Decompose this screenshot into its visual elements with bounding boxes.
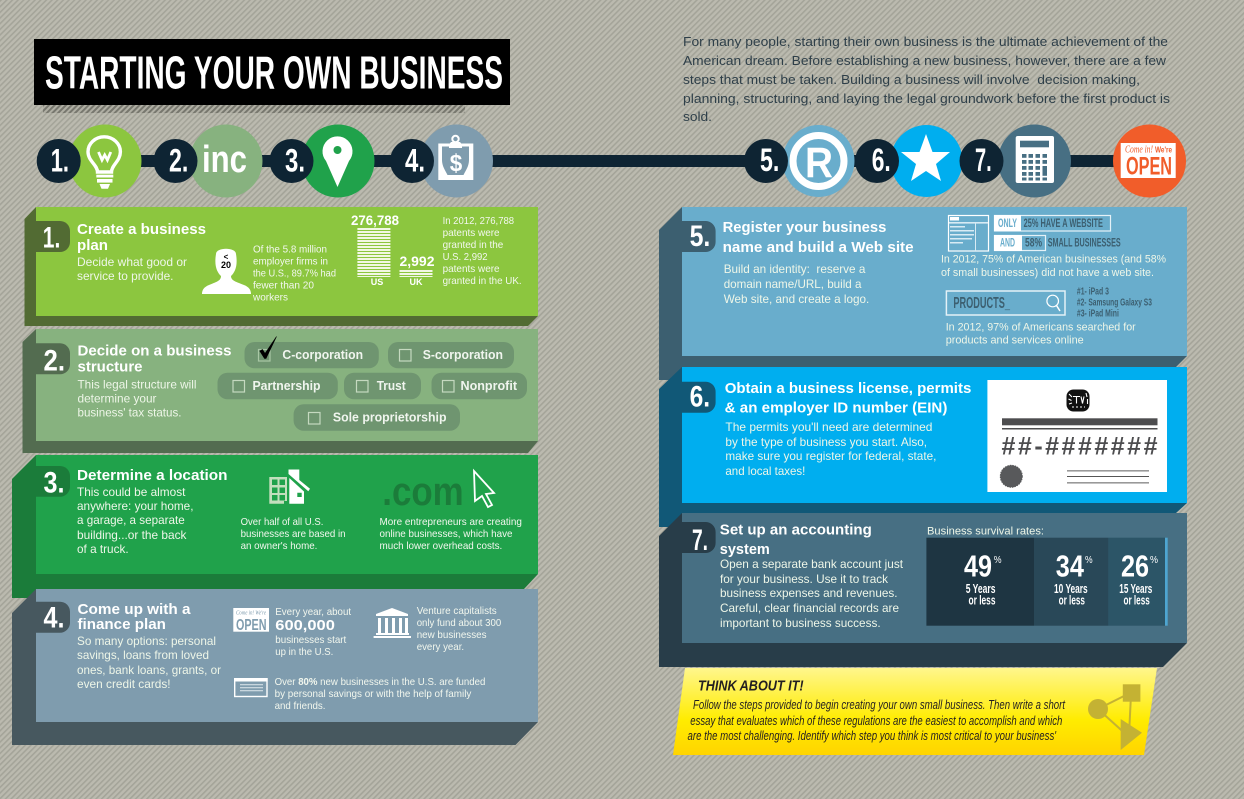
description 3 bbox=[77, 485, 194, 556]
step 5 marker: registered mark: 5. bbox=[760, 142, 779, 178]
option: Partnership bbox=[218, 373, 338, 399]
panel 5: register your business bbox=[659, 207, 1187, 380]
stat: employer firms: fewer than 20 bbox=[253, 279, 314, 291]
number tab 6: 6. bbox=[690, 381, 710, 414]
stat: 600,000 businesses: Every year, about bbox=[275, 606, 351, 618]
callout heading: THINK ABOUT IT! bbox=[698, 678, 804, 695]
survival column: 5 years: 5 Years bbox=[966, 582, 996, 596]
bar chart: patents US vs UK: UK bbox=[410, 277, 423, 287]
stat box: 58% small businesses: SMALL BUSINESSES bbox=[1048, 236, 1121, 250]
icon: connected shapes bbox=[1088, 684, 1142, 750]
stat: personal savings funding: by personal savings or with the help of family bbox=[275, 688, 472, 700]
description 5: Build an identity: reserve a bbox=[724, 262, 866, 276]
stat text: web site ownership bbox=[941, 254, 1166, 279]
stat text: online searches: products and services online bbox=[946, 335, 1084, 347]
intro paragraph: planning, structuring, and laying the legal groundwork before the first product is bbox=[683, 91, 1170, 106]
stat: online businesses bbox=[380, 516, 522, 552]
heading 6 bbox=[725, 380, 971, 416]
description 4: savings, loans from loved bbox=[77, 648, 209, 662]
icon: building and house bbox=[269, 470, 310, 504]
stat: employer firms bbox=[252, 243, 336, 303]
survival column: 5 years: 49 bbox=[964, 549, 992, 584]
icon: person with fewer than 20: 20 bbox=[221, 260, 231, 270]
stat: patents: U.S. 2,992 bbox=[443, 251, 488, 263]
callout: think about it bbox=[673, 668, 1157, 755]
stat: personal savings funding: and friends. bbox=[275, 700, 326, 712]
description 7: important to business success. bbox=[720, 616, 881, 630]
number tab 7: 7. bbox=[692, 524, 708, 557]
list: top searched products: #2- Samsung Galaxy S3 bbox=[1077, 298, 1152, 309]
step 5 marker: registered mark bbox=[744, 125, 854, 197]
survival column: 10 years: 34 bbox=[1056, 549, 1085, 584]
option: Nonprofit bbox=[432, 373, 527, 399]
option: S-corporation bbox=[388, 342, 514, 368]
stat: 600,000 businesses: businesses start bbox=[275, 634, 346, 646]
stat: home-based businesses: Over half of all U.S. bbox=[241, 516, 323, 528]
survival column: 5 years: % bbox=[994, 555, 1002, 566]
option: C-corporation (checked) bbox=[244, 336, 379, 368]
stat: personal savings funding: Over 80% new businesses in the U.S. are funded bbox=[275, 676, 486, 688]
stat: employer firms: the U.S., 89.7% had bbox=[253, 267, 336, 279]
icon: bank check bbox=[234, 678, 268, 696]
heading 3: Determine a location bbox=[77, 467, 228, 484]
stat: patents: In 2012, 276,788 bbox=[443, 215, 514, 227]
stat: employer firms: employer firms in bbox=[253, 255, 328, 267]
end marker: open sign: Come in! bbox=[1125, 144, 1153, 156]
intro paragraph: steps that must be taken. Building a business will involve decision making, bbox=[683, 72, 1140, 87]
description 7: Open a separate bank account just bbox=[720, 557, 904, 571]
bar chart: patents US vs UK: US bbox=[371, 277, 383, 287]
description 1: Decide what good or bbox=[77, 255, 187, 269]
stat: venture capitalists: every year. bbox=[417, 641, 464, 653]
description 2 bbox=[78, 378, 196, 420]
description 7 bbox=[720, 557, 904, 630]
panel 2: business structure bbox=[22, 329, 538, 453]
survival column: 15 years: % bbox=[1150, 555, 1158, 566]
heading 7: Set up an accounting bbox=[720, 522, 872, 539]
stat: 600,000 businesses: up in the U.S. bbox=[275, 646, 333, 658]
description 4: even credit cards! bbox=[77, 677, 171, 691]
step 6 marker: star: 6. bbox=[872, 142, 891, 178]
stat: patents: patents were bbox=[443, 227, 500, 239]
callout text: are the most challenging. Identify which step you think is most critical to your business' bbox=[688, 729, 1057, 743]
end marker: open sign: OPEN bbox=[1126, 152, 1172, 180]
stat: online businesses: online businesses, which have bbox=[380, 528, 513, 540]
description 4: ones, bank loans, grants, or bbox=[77, 663, 221, 677]
description 1 bbox=[77, 255, 187, 283]
description 2: determine your bbox=[78, 392, 156, 406]
option: Trust: Trust bbox=[377, 379, 406, 393]
description 6: The permits you'll need are determined bbox=[725, 420, 932, 434]
end marker: open sign: We're bbox=[1155, 146, 1172, 154]
description 7: business expenses and revenues. bbox=[720, 586, 898, 600]
stat: 600,000 businesses bbox=[275, 606, 351, 658]
stat: personal savings funding bbox=[275, 676, 486, 712]
option: Partnership: Partnership bbox=[252, 379, 321, 393]
stat: 600,000 businesses: 600,000 bbox=[275, 617, 335, 634]
description 3: building...or the back bbox=[77, 528, 187, 542]
timeline of steps bbox=[37, 124, 1186, 198]
panel 6: license, permits and EIN bbox=[659, 367, 1187, 527]
heading 4: Come up with a bbox=[78, 601, 191, 618]
step 2 marker: inc: 2. bbox=[169, 143, 188, 179]
description 1: service to provide. bbox=[77, 269, 174, 283]
heading 6: & an employer ID number (EIN) bbox=[725, 399, 947, 416]
step 4 marker: clipboard: $ bbox=[450, 150, 463, 177]
list: top searched products: #3- iPad Mini bbox=[1077, 309, 1119, 320]
intro paragraph: sold. bbox=[683, 109, 712, 124]
icon: open sign bbox=[233, 608, 269, 634]
stat: patents: granted in the bbox=[443, 239, 503, 251]
icon: open sign: OPEN bbox=[236, 617, 266, 634]
title bbox=[34, 39, 510, 113]
description 7: Careful, clear financial records are bbox=[720, 601, 899, 615]
icon: open sign: Come in! We're bbox=[236, 610, 266, 616]
number tab 1: 1. bbox=[43, 222, 60, 255]
survival column: 10 years: 10 Years bbox=[1054, 582, 1088, 596]
panel 3: determine a location bbox=[12, 455, 538, 598]
callout text bbox=[688, 698, 1065, 743]
panel 7: accounting system bbox=[659, 513, 1187, 667]
option: Sole proprietorship: Sole proprietorship bbox=[333, 410, 447, 424]
description 4 bbox=[77, 634, 221, 691]
stat: online businesses: More entrepreneurs are creating bbox=[380, 516, 522, 528]
stat: venture capitalists: Venture capitalists bbox=[417, 605, 497, 617]
list: top searched products bbox=[1077, 286, 1152, 320]
step 2 marker: inc: inc bbox=[202, 139, 247, 181]
icon: browser window bbox=[948, 216, 988, 251]
bar chart: patents US vs UK bbox=[351, 213, 434, 287]
stat text: online searches: In 2012, 97% of Americans searched for bbox=[946, 322, 1136, 334]
stat: venture capitalists: only fund about 300 bbox=[417, 617, 501, 629]
list: top searched products: #1- iPad 3 bbox=[1077, 286, 1109, 297]
bar chart: patents US vs UK: 276,788 bbox=[351, 213, 399, 228]
callout text: Follow the steps provided to begin creating your own small business. Then write a short bbox=[693, 698, 1065, 712]
description 5: Web site, and create a logo. bbox=[724, 292, 869, 306]
stat text: web site ownership: In 2012, 75% of American businesses (and 58% bbox=[941, 254, 1166, 266]
description 5 bbox=[724, 262, 869, 306]
heading 1: Create a business bbox=[77, 221, 206, 238]
description 3: This could be almost bbox=[77, 485, 186, 499]
icon: .com with cursor: .com bbox=[382, 470, 464, 514]
stat: home-based businesses: an owner's home. bbox=[241, 540, 317, 552]
stat box: 58% small businesses: AND bbox=[1000, 236, 1015, 250]
survival rates chart: Business survival rates: bbox=[927, 526, 1044, 538]
icon: search box bbox=[946, 291, 1065, 315]
stat text: web site ownership: of small businesses) did not have a web site. bbox=[941, 267, 1154, 279]
step 6 marker: star bbox=[855, 125, 962, 197]
stat: home-based businesses: businesses are based in bbox=[241, 528, 346, 540]
description 2: This legal structure will bbox=[78, 378, 196, 392]
survival column: 15 years: 26 bbox=[1121, 549, 1149, 584]
description 5: domain name/URL, build a bbox=[724, 277, 862, 291]
step 2 marker: inc bbox=[154, 124, 262, 198]
step 3 marker: map pin: 3. bbox=[285, 143, 305, 179]
heading 5: Register your business bbox=[723, 219, 886, 236]
number tab 3: 3. bbox=[44, 466, 64, 499]
description 6 bbox=[725, 420, 936, 478]
step 1 marker: light bulb: 1. bbox=[51, 143, 69, 179]
description 6: and local taxes! bbox=[725, 464, 805, 478]
EIN number format: ##-####### bbox=[1002, 432, 1158, 460]
icon: bank bbox=[374, 608, 411, 638]
stat: patents bbox=[443, 215, 522, 287]
heading 4: finance plan bbox=[78, 616, 166, 633]
stat: patents: patents were bbox=[443, 263, 500, 275]
step 7 marker: calculator: 7. bbox=[975, 142, 992, 178]
stat: online businesses: much lower overhead costs. bbox=[380, 540, 502, 552]
number tab 2: 2. bbox=[44, 345, 65, 378]
heading 5 bbox=[723, 219, 914, 256]
heading 2: structure bbox=[78, 359, 142, 376]
survival column: 5 years bbox=[926, 538, 1034, 626]
heading 6: Obtain a business license, permits bbox=[725, 380, 971, 397]
bar chart: patents US vs UK: 2,992 bbox=[400, 254, 434, 269]
stat box: 25% have a website bbox=[994, 215, 1110, 231]
stat box: 25% have a website: ONLY bbox=[998, 216, 1017, 230]
option: Trust bbox=[344, 373, 421, 399]
heading 7 bbox=[720, 522, 872, 558]
icon: search box: PRODUCTS_ bbox=[953, 295, 1011, 312]
heading 5: name and build a Web site bbox=[723, 239, 914, 256]
description 3: of a truck. bbox=[77, 542, 129, 556]
panel 4: finance plan bbox=[12, 589, 538, 745]
description 3: a garage, a separate bbox=[77, 513, 185, 527]
survival column: 15 years: 15 Years bbox=[1119, 582, 1152, 596]
description 6: make sure you register for federal, state, bbox=[725, 449, 936, 463]
stat box: 58% small businesses bbox=[994, 235, 1121, 251]
EIN document card bbox=[987, 380, 1167, 492]
stat: home-based businesses bbox=[241, 516, 346, 552]
panel 1: create a business plan bbox=[24, 207, 538, 326]
survival rates chart bbox=[926, 526, 1168, 626]
survival column: 15 years: or less bbox=[1124, 594, 1150, 608]
heading 1: plan bbox=[77, 237, 108, 254]
survival column: 15 years bbox=[1108, 538, 1168, 626]
intro paragraph: For many people, starting their own business is the ultimate achievement of the bbox=[683, 34, 1168, 49]
option: S-corporation: S-corporation bbox=[423, 348, 503, 362]
survival column: 10 years: % bbox=[1085, 555, 1093, 566]
intro paragraph bbox=[683, 34, 1170, 124]
number tab 5: 5. bbox=[690, 220, 710, 253]
heading 2: Decide on a business bbox=[78, 343, 231, 360]
stat: venture capitalists bbox=[417, 605, 501, 653]
description 2: business' tax status. bbox=[78, 406, 182, 420]
survival column: 10 years: or less bbox=[1059, 594, 1085, 608]
option: Sole proprietorship bbox=[294, 404, 460, 431]
description 3: anywhere: your home, bbox=[77, 499, 194, 513]
stat: venture capitalists: new businesses bbox=[417, 629, 486, 641]
number tab 7 bbox=[682, 522, 716, 557]
description 4: So many options: personal bbox=[77, 634, 216, 648]
step 7 marker: calculator bbox=[960, 124, 1071, 198]
heading 1 bbox=[77, 221, 206, 254]
stat box: 25% have a website: 25% HAVE A WEBSITE bbox=[1024, 216, 1103, 230]
heading 4 bbox=[78, 601, 191, 633]
stat text: online searches bbox=[946, 322, 1136, 347]
stat: employer firms: Of the 5.8 million bbox=[253, 243, 327, 255]
icon: person with fewer than 20: < bbox=[224, 252, 229, 262]
option: Nonprofit: Nonprofit bbox=[460, 379, 518, 393]
step 5 marker: registered mark: R bbox=[805, 139, 833, 187]
description 7: for your business. Use it to track bbox=[720, 572, 889, 586]
icon: IRS seal bbox=[1066, 390, 1090, 412]
heading 2 bbox=[78, 343, 231, 376]
stat: employer firms: workers bbox=[252, 291, 288, 303]
description 6: by the type of business you start. Also, bbox=[725, 435, 927, 449]
step 1 marker: light bulb bbox=[37, 124, 142, 198]
step 3 marker: map pin bbox=[270, 124, 374, 198]
heading 7: system bbox=[720, 541, 770, 558]
step 4 marker: clipboard: 4. bbox=[405, 143, 425, 179]
number tab 4: 4. bbox=[44, 602, 64, 635]
step 4 marker: clipboard bbox=[390, 124, 493, 198]
survival column: 5 years: or less bbox=[968, 594, 996, 608]
stat: patents: granted in the UK. bbox=[443, 275, 522, 287]
icon: person with fewer than 20 bbox=[202, 249, 251, 294]
callout text: essay that evaluates which of these regulations are the easiest to accomplish and which bbox=[690, 714, 1062, 728]
stat box: 58% small businesses: 58% bbox=[1025, 236, 1042, 250]
option: C-corporation (checked): C-corporation bbox=[282, 348, 363, 362]
end marker: open sign bbox=[1113, 124, 1186, 198]
intro paragraph: American dream. Before establishing a new business, however, there are a few bbox=[683, 53, 1166, 68]
title: STARTING YOUR OWN BUSINESS bbox=[45, 46, 503, 98]
survival column: 10 years bbox=[1034, 538, 1108, 626]
